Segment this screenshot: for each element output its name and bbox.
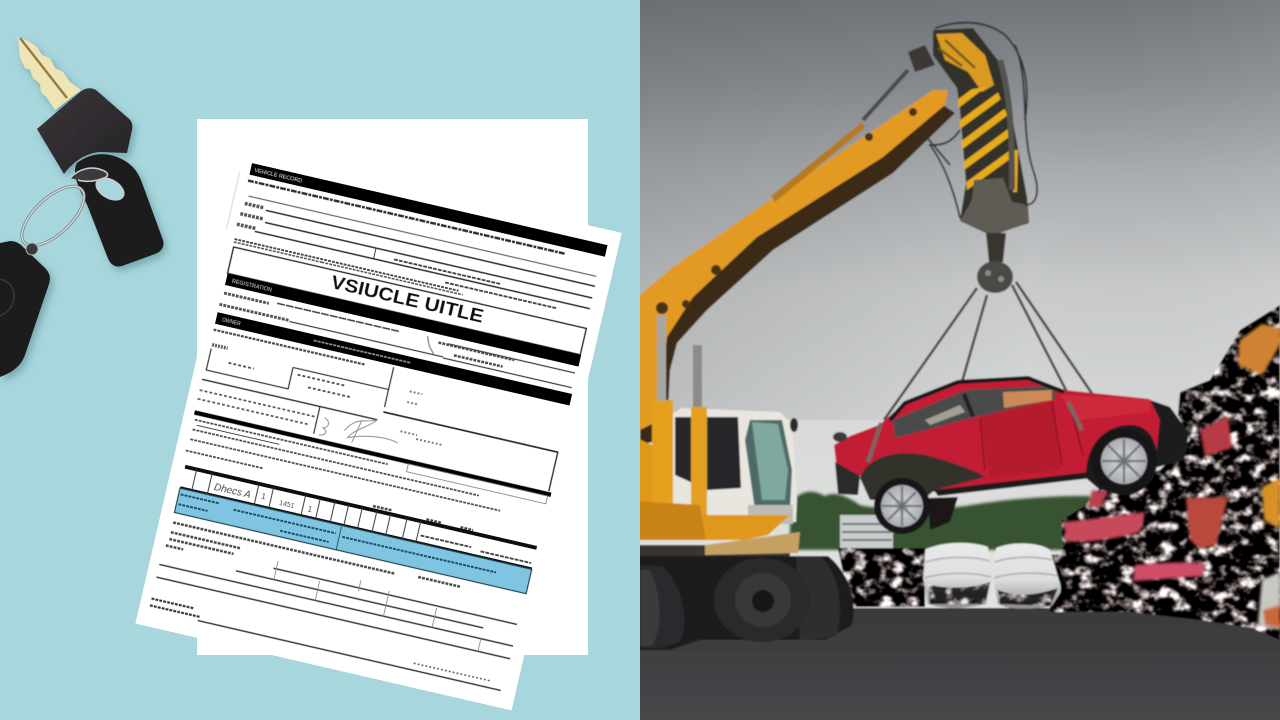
far tyre xyxy=(928,497,958,530)
side mirror xyxy=(790,418,798,432)
inspection box xyxy=(186,371,561,533)
dark sill and wheel arch xyxy=(860,453,985,500)
mirror xyxy=(833,432,847,442)
truck cab xyxy=(620,315,800,556)
hydraulic cylinder xyxy=(771,122,865,202)
panel: vehicle title document xyxy=(135,146,622,710)
front wheel xyxy=(874,478,930,534)
handwritten signature xyxy=(319,408,402,453)
remote fob xyxy=(0,241,50,377)
roof rail xyxy=(890,378,1064,420)
boom dark underside xyxy=(640,105,955,445)
header form lines xyxy=(233,180,601,320)
right scrap pile xyxy=(1060,305,1280,640)
crane hook head with hazard stripes xyxy=(925,23,1037,236)
tree line xyxy=(790,492,1100,550)
crane boom xyxy=(620,45,955,445)
table row with cells: 1451 xyxy=(278,500,295,510)
key ring xyxy=(12,176,94,256)
table row with cells: Dhecs A xyxy=(213,482,252,501)
header band xyxy=(249,163,608,257)
bale crease lines xyxy=(924,557,1058,578)
header band: VEHICLE RECORD xyxy=(254,168,303,185)
key head xyxy=(37,88,132,174)
side window xyxy=(675,417,741,490)
key groove xyxy=(20,38,67,98)
slings xyxy=(884,282,1093,420)
boom pins xyxy=(656,108,917,314)
document faint edge xyxy=(227,172,240,229)
ground xyxy=(620,608,1280,720)
hook and lifting slings xyxy=(884,233,1093,420)
title box xyxy=(227,242,587,355)
third band xyxy=(215,312,572,406)
windshield xyxy=(745,420,792,510)
rear left tyres xyxy=(640,566,684,648)
boom yellow face xyxy=(620,90,948,440)
second band xyxy=(225,273,581,367)
fob rear tag xyxy=(75,154,164,267)
door shading xyxy=(980,402,1060,478)
dark lower mottling of white bales xyxy=(928,582,1058,606)
tyre mass xyxy=(620,556,854,650)
tyres behind main wheel xyxy=(796,556,840,640)
table row with cells: 1 xyxy=(260,492,267,502)
dark bale row right xyxy=(1049,554,1123,614)
side windows xyxy=(893,386,1056,438)
yellow stripes xyxy=(956,87,1010,191)
cab shell xyxy=(672,408,797,525)
yellow posts xyxy=(652,400,673,515)
icon: car keys with fobs xyxy=(0,37,164,377)
rear wheel xyxy=(1091,429,1157,495)
remote button ring xyxy=(0,279,14,316)
white bale left xyxy=(923,543,992,608)
dark bale row left xyxy=(838,548,925,607)
blue data band xyxy=(174,488,532,594)
key blade xyxy=(18,37,81,110)
white box truck in background xyxy=(840,515,893,549)
table row with cells xyxy=(180,463,538,569)
grey mast rods xyxy=(657,315,666,401)
head body xyxy=(933,28,1029,235)
chassis xyxy=(620,430,790,540)
front lower dark bumper xyxy=(835,462,860,495)
grey base block xyxy=(960,178,1029,236)
panel: left paperwork background xyxy=(0,0,640,720)
second section lines xyxy=(219,289,576,388)
lower cab panel xyxy=(748,505,793,524)
sky xyxy=(620,0,1280,620)
panel: scrapyard photo xyxy=(620,0,1280,720)
lifting strap on car xyxy=(868,402,1082,462)
white bale right xyxy=(993,543,1062,609)
fob hole xyxy=(93,174,127,204)
ring loop xyxy=(26,243,38,255)
hydraulic cables xyxy=(925,23,1037,218)
main tyre xyxy=(714,558,810,642)
hydraulic rod xyxy=(863,70,908,120)
owner detail cells xyxy=(196,326,568,488)
third band: OWNER xyxy=(221,317,242,328)
second band: REGISTRATION xyxy=(231,279,272,294)
document title: VSIUCLE UITLE xyxy=(329,272,486,327)
truck wheels xyxy=(620,556,854,650)
panel: back blank sheet of paper xyxy=(197,119,588,655)
lifted red car xyxy=(833,378,1189,534)
document sheet xyxy=(135,146,622,710)
table row with cells: 1 xyxy=(307,504,314,514)
hook swivel xyxy=(986,233,1006,262)
top yellow casing xyxy=(936,33,994,92)
head mount xyxy=(908,45,935,72)
red and orange crushed panels xyxy=(1064,324,1280,630)
car red body xyxy=(834,378,1160,492)
door seams xyxy=(980,402,1083,470)
lower form lines and labels xyxy=(149,520,523,691)
rear dark bumper xyxy=(1150,400,1189,468)
crushed car bales background xyxy=(838,543,1140,612)
